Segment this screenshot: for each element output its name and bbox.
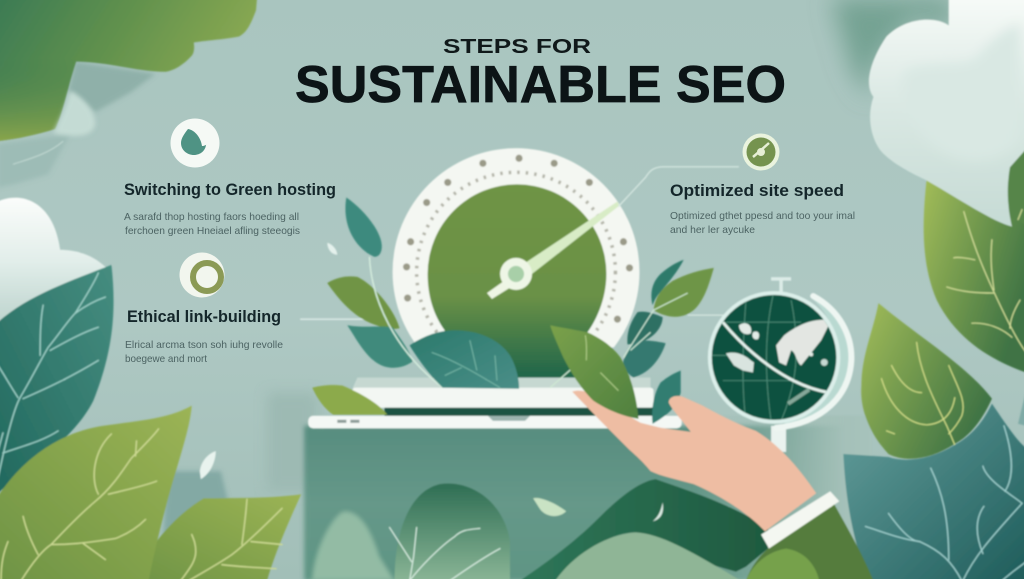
plant leaves around gauge	[312, 197, 714, 424]
globe stand	[771, 279, 791, 292]
sleeve: dark green	[520, 479, 768, 579]
leaf: teal left	[347, 325, 413, 368]
step description	[125, 339, 283, 365]
lower-left olive leaves	[0, 406, 301, 579]
gauge needle	[487, 201, 619, 299]
stem: front leaf	[550, 366, 574, 388]
step description: Elrical arcma tson soh iuhg revolle	[125, 339, 283, 351]
globe	[701, 279, 852, 452]
upper floating petal	[327, 243, 337, 255]
plant stem	[369, 257, 443, 388]
connector line: speed	[618, 167, 739, 207]
sleeve: olive	[746, 504, 873, 579]
left cloud	[0, 198, 113, 325]
laptop screen edge	[352, 378, 651, 389]
petal on sleeve	[653, 502, 663, 521]
title line 2: SUSTAINABLE SEO	[295, 56, 786, 114]
leaf: olive laptop left	[312, 385, 388, 415]
step: optimized site speed	[670, 134, 855, 236]
right large olive leaf	[924, 179, 1024, 372]
leaves: right cluster	[623, 260, 714, 424]
dial gauge	[393, 148, 640, 396]
gauge outer ring	[392, 147, 640, 349]
step description: ferchoen green Hneiael afling steeogis	[125, 225, 300, 237]
hand	[572, 391, 816, 531]
step description	[670, 210, 855, 236]
globe body	[710, 293, 838, 422]
laptop base	[308, 416, 682, 428]
bottom teal backdrop	[304, 416, 871, 579]
top-right dark olive leaf	[1004, 144, 1024, 250]
globe outer arc	[776, 296, 851, 428]
right cloud	[869, 0, 1024, 227]
step description: A sarafd thop hosting faors hoeding all	[124, 211, 299, 223]
lower-left petal	[200, 451, 216, 479]
step description: boegewe and mort	[125, 353, 207, 365]
step description: and her ler aycuke	[670, 224, 755, 236]
laptop	[308, 378, 682, 428]
right centre olive leaf	[861, 303, 992, 459]
globe crescent	[776, 296, 852, 428]
connector line: globe	[688, 314, 725, 316]
step: switching to green hosting	[124, 118, 336, 237]
bottom-right teal leaf	[843, 391, 1024, 579]
icon: leaf ring	[180, 252, 224, 298]
step description	[124, 211, 300, 237]
step heading: Optimized site speed	[670, 181, 844, 200]
shirt cuff	[761, 491, 839, 549]
top-left foliage	[0, 0, 257, 164]
icon: leaf	[170, 118, 220, 168]
step heading: Ethical link-building	[127, 307, 281, 326]
step: ethical link-building	[125, 252, 283, 365]
leaf: teal upright	[345, 197, 382, 257]
connector line: link-building	[300, 318, 379, 320]
leaf: large olive front	[550, 325, 639, 419]
leaf: large teal	[410, 330, 519, 389]
icon: gauge badge	[742, 134, 780, 170]
gauge markers	[402, 154, 634, 334]
step heading: Switching to Green hosting	[124, 180, 336, 199]
leaf: olive left	[327, 276, 400, 329]
bottom centre mounds	[312, 484, 510, 579]
floating petal	[533, 498, 566, 516]
gauge green face	[428, 184, 606, 388]
title	[295, 36, 786, 114]
laptop hinge	[384, 408, 654, 416]
step description: Optimized gthet ppesd and too your imal	[670, 210, 855, 222]
globe map	[712, 296, 830, 420]
light green mound	[555, 532, 741, 579]
title line 1: STEPS FOR	[443, 36, 592, 58]
left teal leaf	[0, 265, 114, 493]
